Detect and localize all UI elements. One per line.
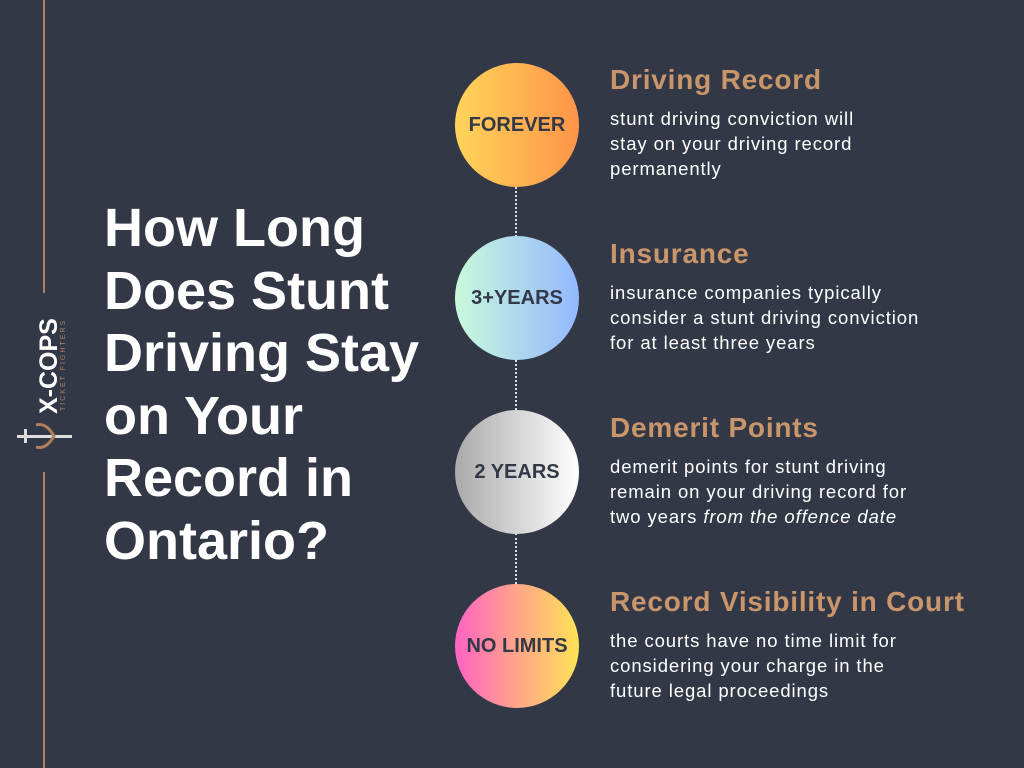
logo text: X-COPS [35, 318, 63, 414]
heading: demerit points: Demerit Points [610, 412, 819, 443]
circle: no limits: NO LIMITS [466, 634, 568, 656]
vertical line top [43, 0, 45, 293]
logo tagline: TICKET FIGHTERS [60, 319, 67, 411]
text: record visibility: the courts have no time limit for [610, 630, 897, 651]
text: demerit points: demerit points for stunt driving [610, 456, 887, 477]
vertical line bottom [43, 472, 45, 768]
title: Ontario? [104, 510, 329, 570]
text: driving record: stunt driving conviction will [610, 108, 854, 129]
text: insurance: for at least three years [610, 332, 816, 353]
circle: 3+years [455, 236, 579, 360]
text: driving record: stay on your driving record [610, 133, 852, 154]
circle: no limits [455, 584, 579, 708]
title: Driving Stay [104, 323, 419, 383]
text: record visibility: considering your charge in the [610, 655, 885, 676]
text: record visibility: future legal proceedings [610, 680, 829, 701]
title: Record in [104, 448, 353, 508]
text: demerit points: two years from the offence date [610, 506, 897, 527]
text: record visibility [610, 630, 897, 701]
text: demerit points [610, 456, 907, 527]
title [104, 198, 419, 570]
connector dots [515, 187, 517, 237]
text: insurance: consider a stunt driving conviction [610, 307, 919, 328]
text: driving record: permanently [610, 158, 722, 179]
circle: forever: FOREVER [469, 114, 565, 136]
text: demerit points: remain on your driving record for [610, 481, 907, 502]
text: insurance: insurance companies typically [610, 282, 882, 303]
text: driving record [610, 108, 854, 179]
icon: sword [17, 424, 72, 448]
circle: 2 years [455, 410, 579, 534]
logo [17, 318, 72, 449]
circle: forever [455, 63, 579, 187]
title: on Your [104, 386, 303, 446]
circle: 3+years: 3+YEARS [471, 286, 563, 308]
heading: insurance: Insurance [610, 238, 749, 269]
circle: 2 years: 2 YEARS [474, 460, 560, 482]
heading: record visibility: Record Visibility in Court [610, 586, 965, 617]
text: insurance [610, 282, 919, 353]
title: How Long [104, 198, 365, 258]
heading: driving record: Driving Record [610, 64, 822, 95]
title: Does Stunt [104, 260, 389, 320]
